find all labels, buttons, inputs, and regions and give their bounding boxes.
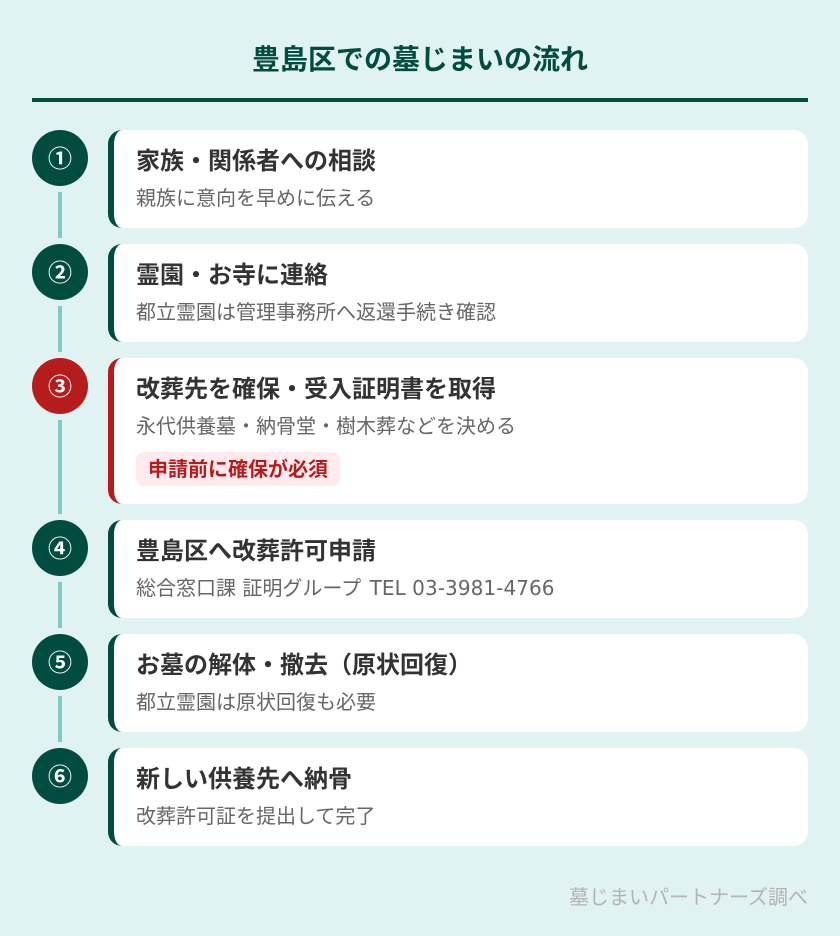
step 1 heading: 家族・関係者への相談 <box>136 141 376 176</box>
step 6 heading: 新しい供養先へ納骨 <box>136 759 352 794</box>
step 3 description: 永代供養墓・納骨堂・樹木葬などを決める <box>136 410 516 439</box>
step 2 description: 都立霊園は管理事務所へ返還手続き確認 <box>136 296 496 325</box>
step 5 marker <box>32 634 88 690</box>
step 3 marker <box>32 358 88 414</box>
step 3 marker: ③ <box>48 367 72 402</box>
step 6 marker <box>32 748 88 804</box>
step 5 heading: お墓の解体・撤去（原状回復） <box>136 645 472 680</box>
source note: 墓じまいパートナーズ調べ <box>569 881 808 910</box>
step 6 description: 改葬許可証を提出して完了 <box>136 800 375 829</box>
panel: step 1 <box>108 130 808 228</box>
step 5 marker: ⑤ <box>48 643 72 678</box>
step 3 warning badge: 申請前に確保が必須 <box>148 453 328 482</box>
step 4 marker: ④ <box>48 529 72 564</box>
step 3 heading: 改葬先を確保・受入証明書を取得 <box>136 369 496 404</box>
step 5 description: 都立霊園は原状回復も必要 <box>136 686 376 715</box>
step 4 heading: 豊島区へ改葬許可申請 <box>136 531 376 566</box>
step 1 marker <box>32 130 88 186</box>
panel: step 3 <box>108 358 808 504</box>
connector 2 to 3 <box>58 306 62 352</box>
panel: step 6 <box>108 748 808 846</box>
step 2 marker <box>32 244 88 300</box>
step 1 marker: ① <box>48 139 72 174</box>
panel: step 4 <box>108 520 808 618</box>
step 2 marker: ② <box>48 253 72 288</box>
step 6 marker: ⑥ <box>48 757 72 792</box>
connector 4 to 5 <box>58 582 62 628</box>
step 4 marker <box>32 520 88 576</box>
connector 3 to 4 <box>58 420 62 514</box>
title: 豊島区での墓じまいの流れ <box>252 38 588 78</box>
connector 5 to 6 <box>58 696 62 742</box>
step 4 description: 総合窓口課 証明グループ TEL 03-3981-4766 <box>136 572 555 601</box>
panel: step 5 <box>108 634 808 732</box>
step 2 heading: 霊園・お寺に連絡 <box>136 255 328 290</box>
connector 1 to 2 <box>58 192 62 238</box>
title rule <box>32 98 808 102</box>
panel: step 2 <box>108 244 808 342</box>
step 1 description: 親族に意向を早めに伝える <box>136 182 375 211</box>
